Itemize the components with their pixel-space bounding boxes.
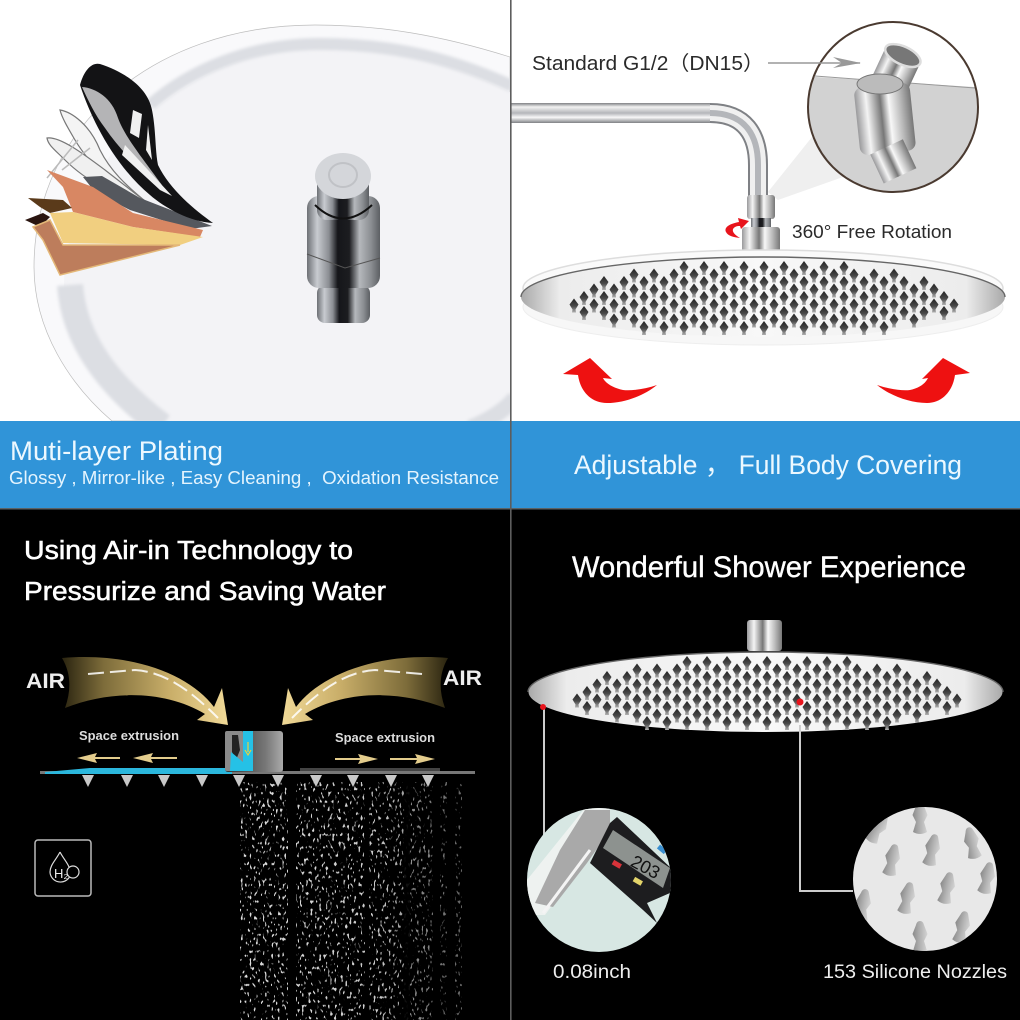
icon: H2O air badge xyxy=(35,840,91,896)
shower plate disc xyxy=(34,25,515,428)
water droplets xyxy=(240,782,462,1020)
heading: Wonderful Shower Experience xyxy=(572,551,966,584)
icon: H2O air badge: H₂ xyxy=(54,866,68,881)
banner heading: Muti-layer Plating xyxy=(10,436,223,466)
label: space extrusion right: Space extrusion xyxy=(335,730,435,745)
banner: adjustable xyxy=(511,421,1020,508)
shower connector xyxy=(307,153,380,323)
shower head xyxy=(521,250,1005,345)
arrow: air left xyxy=(62,657,228,725)
label: standard connector: Standard G1/2（DN15） xyxy=(532,52,764,75)
callout: caliper thickness: 203 xyxy=(628,851,663,883)
icon: plating layers xyxy=(25,64,213,275)
label: air right: AIR xyxy=(443,667,482,690)
shower arm pipe xyxy=(511,103,780,256)
diagram: shower head section xyxy=(40,731,475,787)
banner: plating xyxy=(0,421,510,508)
shower head xyxy=(528,620,1003,732)
arrow: tilt left xyxy=(563,358,657,403)
label: air left: AIR xyxy=(26,670,65,693)
banner text: Adjustable ， Full Body Covering xyxy=(574,450,962,480)
arrows: extrusion direction xyxy=(77,753,435,764)
label: thickness: 0.08inch xyxy=(553,962,631,983)
panel: shower experience xyxy=(527,555,1006,978)
leader line: thickness xyxy=(540,704,546,835)
panel: multi-layer plating xyxy=(0,0,515,428)
heading: Pressurize and Saving Water xyxy=(24,578,387,606)
banner subtext: Glossy , Mirror-like , Easy Cleaning , Oxidation Resistance xyxy=(9,468,499,488)
heading xyxy=(24,537,387,606)
panel: adjustable arm xyxy=(511,0,1020,421)
label: space extrusion left: Space extrusion xyxy=(79,728,179,743)
icon: rotation arrow xyxy=(726,218,749,238)
callout: caliper thickness xyxy=(527,808,673,952)
panel: air-in technology xyxy=(26,540,482,1020)
arrow: air right xyxy=(282,657,448,725)
label: nozzles: 153 Silicone Nozzles xyxy=(823,962,1007,983)
arrow: connector pointer xyxy=(768,57,861,68)
arrow: tilt right xyxy=(877,358,970,403)
label: free rotation: 360° Free Rotation xyxy=(792,221,952,242)
heading: Using Air-in Technology to xyxy=(24,537,353,565)
callout: silicone nozzles xyxy=(853,802,998,953)
magnified connector callout xyxy=(768,22,990,200)
leader line: nozzles xyxy=(796,698,853,891)
